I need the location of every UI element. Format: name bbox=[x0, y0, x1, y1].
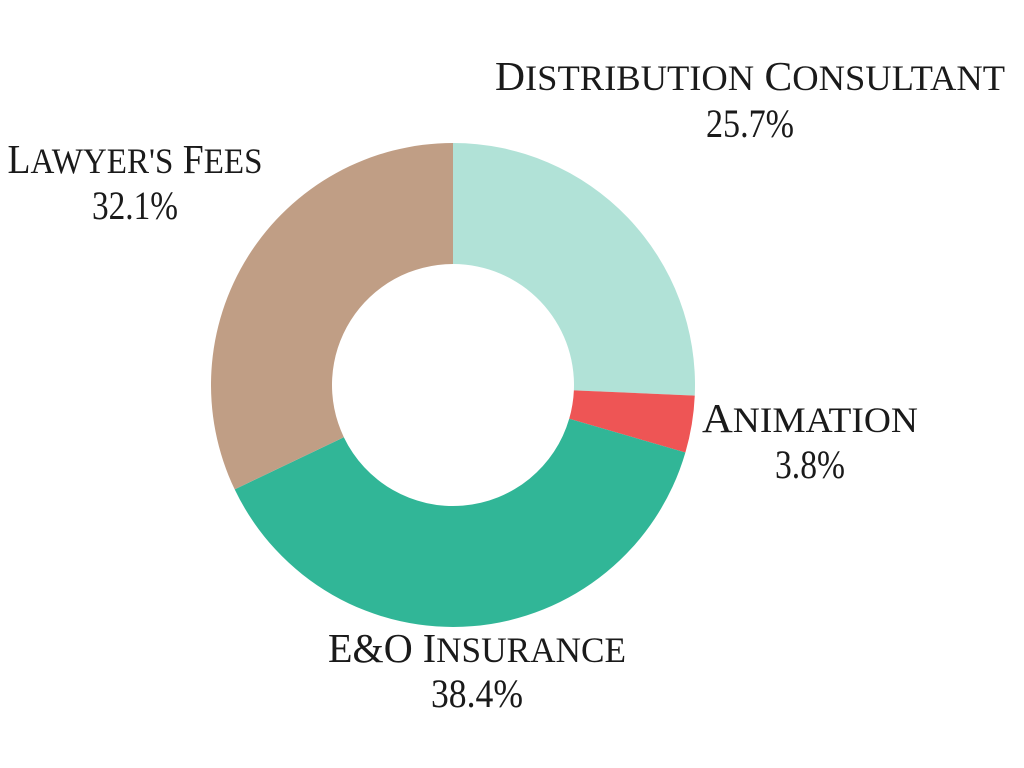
label: E&O Insurance: E&O INSURANCE bbox=[328, 625, 626, 671]
segment: E&O Insurance bbox=[235, 419, 685, 627]
label: Distribution Consultant: 25.7% bbox=[706, 101, 794, 146]
label: E&O Insurance: 38.4% bbox=[431, 671, 523, 716]
label: Distribution Consultant: DISTRIBUTION CONSULTANT bbox=[495, 53, 1005, 99]
label: E&O Insurance bbox=[328, 625, 626, 716]
label: Lawyer's Fees: 32.1% bbox=[92, 183, 178, 228]
label: Animation: ANIMATION bbox=[702, 395, 918, 441]
label: Lawyer's Fees bbox=[8, 136, 262, 228]
segment: Animation bbox=[569, 390, 695, 452]
segment: Distribution Consultant bbox=[453, 143, 695, 396]
segment: Lawyer's Fees bbox=[211, 143, 453, 489]
label: Lawyer's Fees: LAWYER'S FEES bbox=[8, 136, 262, 182]
label: Distribution Consultant bbox=[495, 53, 1005, 146]
label: Animation bbox=[702, 395, 918, 487]
donut chart bbox=[211, 143, 695, 627]
label: Animation: 3.8% bbox=[775, 442, 845, 487]
